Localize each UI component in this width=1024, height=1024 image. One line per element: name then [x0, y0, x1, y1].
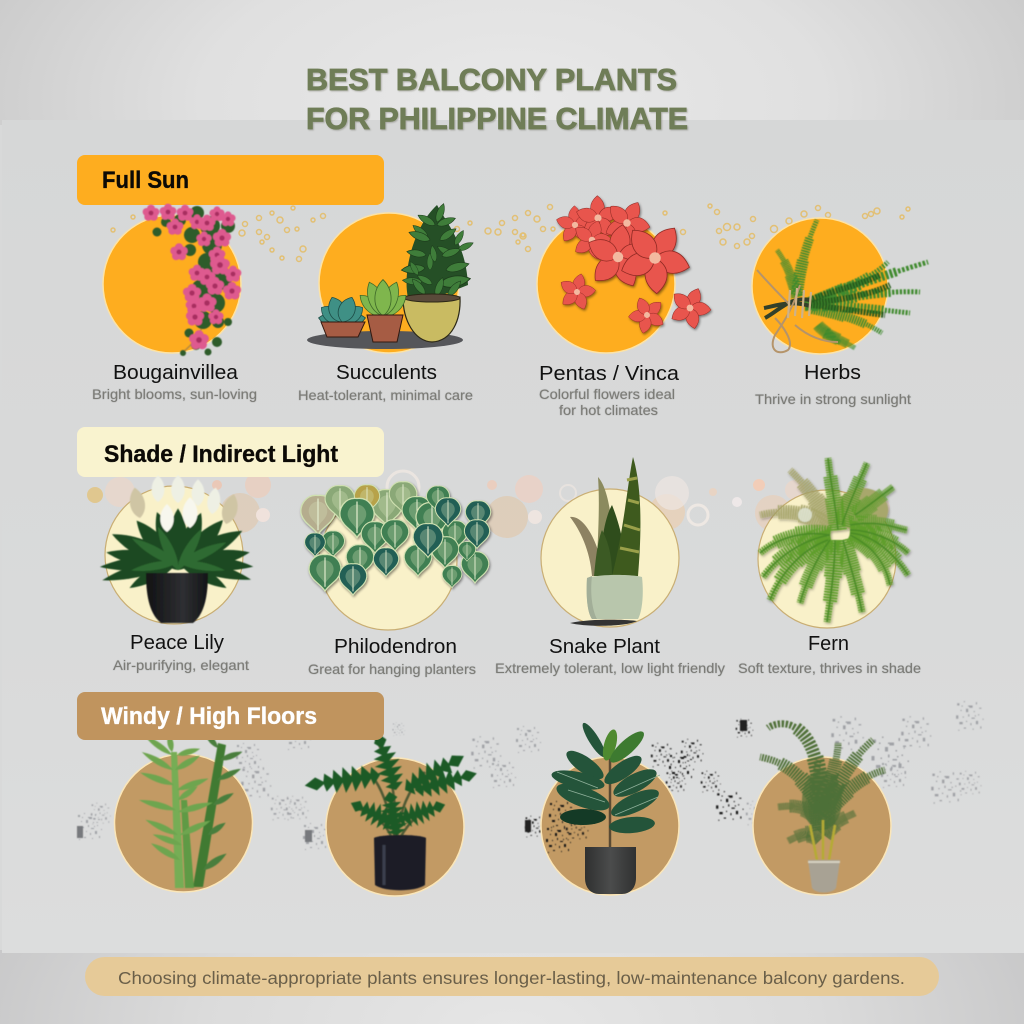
description: fern: Soft texture, thrives in shade — [738, 660, 921, 676]
title: BEST BALCONY PLANTS — [306, 62, 677, 97]
footer callout: Choosing climate-appropriate plants ensures longer-lasting, low-maintenance balcony gardens. — [118, 968, 905, 988]
description: pentas / vinca: for hot climates — [559, 402, 658, 418]
icon: zz plant — [303, 729, 480, 890]
icon: snake plant — [570, 457, 643, 626]
bokeh lights — [87, 471, 890, 538]
label: fern: Fern — [808, 633, 849, 655]
label: bougainvillea: Bougainvillea — [113, 362, 239, 384]
label: snake plant: Snake Plant — [549, 636, 660, 658]
label: succulents: Succulents — [336, 362, 437, 384]
sparkle dots — [111, 204, 910, 262]
label: herbs: Herbs — [804, 362, 861, 384]
description: succulents: Heat-tolerant, minimal care — [298, 387, 473, 403]
plant card: zz plant — [303, 729, 480, 896]
footer callout — [85, 957, 939, 996]
description: philodendron: Great for hanging planters — [308, 661, 476, 677]
plant card: herbs — [752, 218, 928, 407]
plant card: pentas / vinca — [537, 191, 719, 418]
plant card: philodendron — [301, 482, 491, 677]
panel: shade / indirect light — [77, 427, 921, 677]
title: FOR PHILIPPINE CLIMATE — [306, 101, 688, 136]
dark specks over rubber plant circle — [546, 801, 588, 853]
plant card: snake plant — [495, 457, 725, 676]
icon: philodendron leaves — [301, 482, 491, 595]
heading: shade / indirect light — [77, 427, 384, 477]
icon: potted succulents — [307, 202, 474, 349]
description: pentas / vinca — [539, 386, 675, 418]
description: herbs: Thrive in strong sunlight — [755, 391, 911, 407]
label: pentas / vinca: Pentas / Vinca — [539, 363, 680, 385]
icon: areca palm — [760, 724, 885, 892]
panel: windy / high floors — [77, 692, 984, 896]
plant card: areca palm — [753, 724, 891, 895]
label: peace lily: Peace Lily — [130, 632, 224, 654]
icon: bamboo — [138, 730, 244, 888]
heading: windy / high floors: Windy / High Floors — [101, 703, 317, 730]
icon: peace lily — [99, 475, 254, 623]
label: philodendron: Philodendron — [334, 636, 457, 658]
description: bougainvillea: Bright blooms, sun-loving — [92, 386, 257, 402]
panel: full sun — [77, 155, 928, 418]
plant card: succulents — [298, 202, 474, 403]
plant card: bamboo — [114, 730, 252, 892]
icon: herb bundle — [757, 220, 928, 352]
description: pentas / vinca: Colorful flowers ideal — [539, 386, 675, 402]
title — [306, 62, 688, 136]
scattered wind specks — [77, 701, 984, 850]
description: peace lily: Air-purifying, elegant — [113, 657, 249, 673]
plant card: peace lily — [99, 475, 254, 673]
heading: windy / high floors — [77, 692, 384, 740]
icon: rubber plant — [550, 720, 662, 894]
icon: bougainvillea vine — [143, 204, 241, 356]
icon: fern — [760, 458, 908, 622]
plant card: bougainvillea — [92, 204, 257, 402]
plant card: rubber plant — [541, 720, 679, 895]
heading: full sun — [77, 155, 384, 205]
icon: red flowers — [553, 191, 719, 342]
plant card: fern — [738, 458, 921, 676]
description: snake plant: Extremely tolerant, low light friendly — [495, 660, 725, 676]
heading: full sun: Full Sun — [102, 167, 189, 194]
heading: shade / indirect light: Shade / Indirect Light — [104, 441, 338, 468]
